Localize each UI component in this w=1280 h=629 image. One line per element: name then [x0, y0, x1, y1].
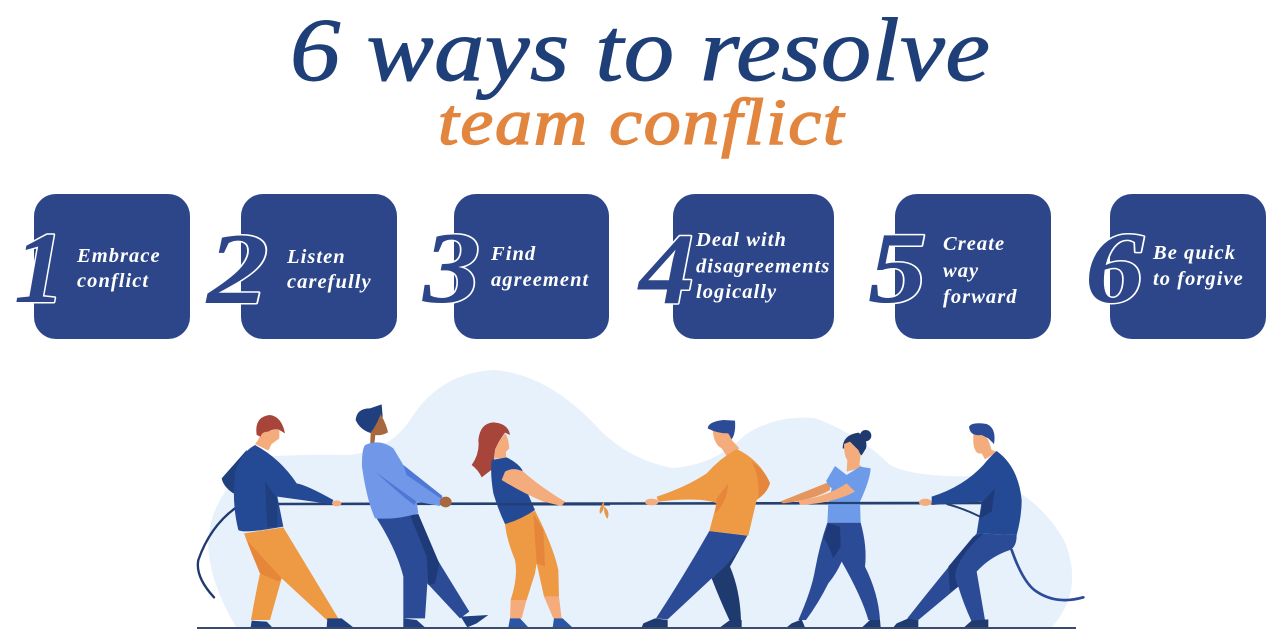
figure 1: man in blue sweater — [198, 415, 353, 627]
label: Create way forward: Create — [943, 233, 1005, 255]
step 5 card — [868, 194, 1051, 339]
step 3 card — [422, 194, 609, 339]
label: Be quick to forgive: Be quick — [1152, 242, 1236, 264]
label: Embrace conflict: conflict — [77, 270, 149, 292]
label: Listen carefully: Listen — [286, 246, 346, 268]
label: Create way forward: forward — [943, 286, 1018, 308]
figure 2: man in light blue sweater — [356, 404, 488, 627]
number 5: 5 — [868, 211, 927, 324]
ground line — [197, 627, 1076, 629]
label: Deal with disagreements logically: logically — [696, 281, 777, 303]
figure 6: man pulling rope end — [893, 423, 1083, 627]
label: Find agreement: Find — [490, 243, 536, 265]
title: 6 ways to resolve: 6 ways to resolve — [290, 0, 990, 100]
figure 4: man in orange sweater — [642, 420, 770, 627]
number 4: 4 — [637, 212, 694, 325]
figure 3: woman with red hair — [472, 422, 610, 627]
label: Deal with disagreements logically: disagreements — [696, 256, 830, 278]
subtitle: team conflict: team conflict — [438, 87, 845, 159]
label: Be quick to forgive: to forgive — [1153, 268, 1244, 290]
number 6: 6 — [1085, 211, 1144, 324]
figure 5: woman with hair bun — [780, 430, 920, 627]
label: Create way forward: way — [943, 260, 979, 282]
fraying rope knot — [600, 502, 608, 519]
number 3: 3 — [422, 213, 480, 325]
label: Deal with disagreements logically: Deal with — [695, 229, 787, 251]
number 2: 2 — [205, 213, 268, 326]
step 2 card — [205, 194, 397, 339]
label: Embrace conflict: Embrace — [76, 245, 161, 267]
step 6 card — [1085, 194, 1266, 339]
main rope — [277, 503, 1000, 504]
background blob — [208, 370, 1072, 627]
label: Find agreement: agreement — [491, 269, 590, 291]
label: Listen carefully: carefully — [287, 271, 372, 293]
step 1 card — [14, 194, 190, 339]
number 1: 1 — [14, 212, 65, 325]
step 4 card — [637, 194, 834, 339]
